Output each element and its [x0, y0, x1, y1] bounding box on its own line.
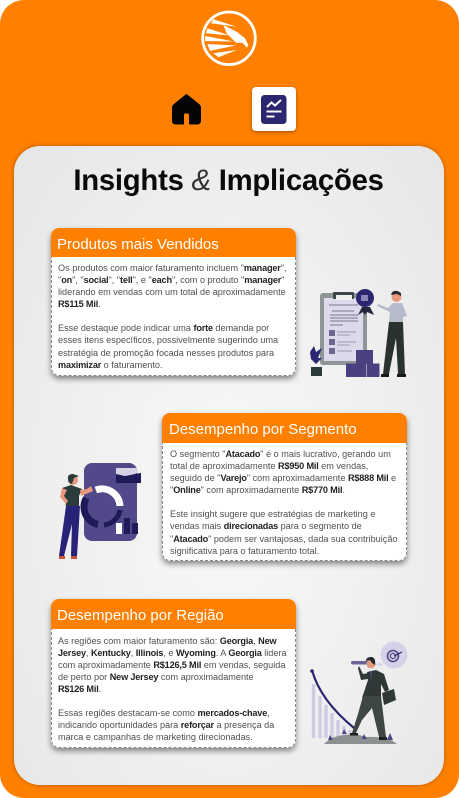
- text block: [51, 629, 296, 748]
- text block: liderando em vendas com um total de aproximadamente: [58, 287, 286, 297]
- title: Insights & Implicações: [73, 164, 384, 197]
- panel: produtos mais vendidos: [51, 228, 296, 376]
- text block: O segmento "Atacado" é o mais lucrativo, gerando um: [170, 449, 391, 459]
- heading: [162, 413, 407, 443]
- text block: [162, 443, 407, 561]
- illustration: donut chart and person: [59, 463, 141, 559]
- text block: R$126 Mil. Essas regiões destacam-se como mercados-chave,: [58, 684, 270, 718]
- heading: Desempenho por Região: [57, 607, 224, 624]
- illustration: man with telescope and curve: [310, 642, 408, 744]
- text block: Jersey, Kentucky, Illinois, e Wyoming. A Georgia lidera: [58, 648, 287, 658]
- text block: total de aproximadamente R$950 Mil em vendas,: [170, 461, 368, 471]
- text block: esses itens específicos, possivelmente sugerindo uma: [58, 335, 278, 345]
- icon: home: [172, 94, 201, 124]
- text block: com aproximadamente R$126,5 Mil em vendas, seguida: [58, 660, 285, 670]
- text block: "Online" com aproximadamente R$770 Mil. Este insight sugere que estratégias de marketing e: [170, 485, 375, 519]
- text block: seguido de "Varejo" com aproximadamente R$888 Mil e: [170, 473, 396, 483]
- text block: significativa para o faturamento total.: [170, 546, 319, 556]
- heading: [51, 599, 296, 629]
- text block: indicando oportunidades para reforçar a presença da: [58, 720, 274, 730]
- text block: "Atacado" podem ser vantajosas, dada sua contribuição: [170, 534, 397, 544]
- heading: Desempenho por Segmento: [169, 421, 357, 438]
- text block: marca e campanhas de marketing direcionadas.: [58, 732, 253, 742]
- text block: Os produtos com maior faturamento incluem "manager",: [58, 263, 286, 273]
- text block: [51, 257, 296, 376]
- text block: estratégia de promoção focada nesses produtos para: [58, 348, 274, 358]
- icon: eagle logo: [201, 10, 257, 66]
- text block: maximizar o faturamento.: [58, 360, 162, 370]
- heading: [51, 228, 296, 257]
- text block: R$115 Mil. Esse destaque pode indicar uma forte demanda por: [58, 299, 269, 333]
- text block: As regiões com maior faturamento são: Georgia, New: [58, 636, 276, 646]
- text block: vendas mais direcionadas para o segmento de: [170, 521, 362, 531]
- icon: report button: [252, 87, 296, 131]
- panel: desempenho por segmento: [162, 413, 407, 561]
- heading: Produtos mais Vendidos: [57, 236, 219, 253]
- text block: de perto por New Jersey com aproximadamente: [58, 672, 254, 682]
- illustration: checklist and man: [310, 289, 407, 377]
- text block: "on", "social", "tell", e "each", com o produto "manager": [58, 275, 284, 285]
- main panel: [14, 146, 444, 785]
- panel: desempenho por regiao: [51, 599, 296, 748]
